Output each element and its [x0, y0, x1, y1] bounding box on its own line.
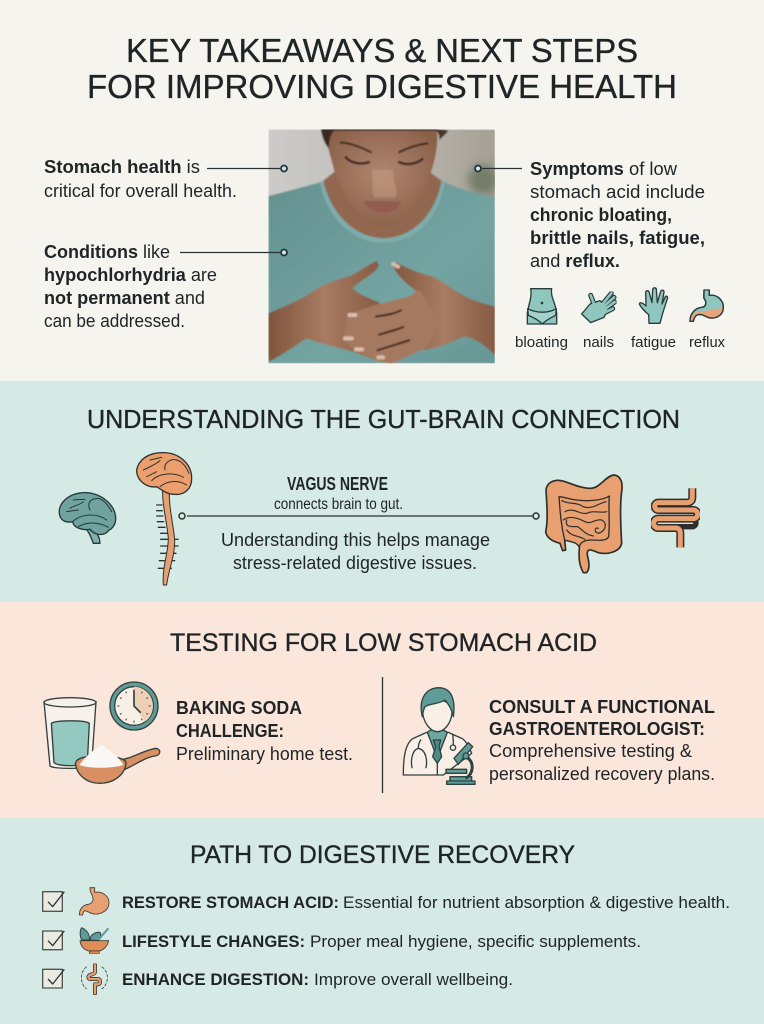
- row: enhance digestion: [43, 965, 513, 993]
- callout: symptoms: chronic bloating,: [530, 205, 672, 225]
- text: vagus nerve: stress-related digestive issues.: [233, 553, 477, 573]
- icon: reflux: [690, 290, 723, 321]
- callout: conditions: Conditions like: [44, 242, 170, 262]
- callout: symptoms: brittle nails, fatigue,: [530, 228, 705, 248]
- text: baking soda challenge: [176, 698, 353, 764]
- text: consult a functional gastroenterologist: [489, 697, 715, 784]
- callout: symptoms: Symptoms of low: [530, 159, 678, 179]
- text: enhance digestion: Improve overall wellbeing.: [314, 970, 513, 989]
- text: enhance digestion: ENHANCE DIGESTION:: [122, 970, 309, 989]
- text: consult a functional gastroenterologist: Comprehensive testing &: [489, 741, 692, 761]
- heading: UNDERSTANDING THE GUT-BRAIN CONNECTION: [87, 404, 680, 434]
- callout: stomach health: [44, 157, 287, 201]
- icon: checkbox and intestine: [43, 965, 107, 993]
- label: fatigue: fatigue: [631, 334, 676, 351]
- panel: key takeaways: [44, 38, 725, 364]
- text: lifestyle changes: [122, 932, 641, 951]
- icon row: symptoms: [515, 288, 725, 351]
- heading: TESTING FOR LOW STOMACH ACID: [170, 629, 597, 657]
- callout: conditions: hypochlorhydria are: [44, 265, 217, 285]
- text: consult a functional gastroenterologist: GASTROENTEROLOGIST:: [489, 719, 705, 739]
- connector: vagus nerve line: [179, 513, 539, 519]
- icon: small intestine: [654, 488, 698, 547]
- icon: large intestine: [546, 475, 622, 573]
- text: baking soda challenge: CHALLENGE:: [176, 721, 284, 741]
- icon: checkbox and stomach: [43, 888, 109, 915]
- text: restore stomach acid: RESTORE STOMACH ACID:: [122, 893, 339, 912]
- icon: checkbox and bowl: [43, 928, 109, 953]
- photo: woman with hands on chest: [268, 129, 498, 364]
- title: KEY TAKEAWAYS & NEXT STEPS: [126, 32, 638, 69]
- panel: gut-brain connection: [0, 381, 764, 602]
- callout: symptoms: stomach acid include: [530, 182, 705, 202]
- row: restore stomach acid: [43, 888, 730, 915]
- label: reflux: reflux: [689, 334, 725, 351]
- text: enhance digestion: [122, 970, 513, 989]
- callout: symptoms: and reflux.: [530, 251, 620, 271]
- text: restore stomach acid: [122, 893, 730, 912]
- text: baking soda challenge: BAKING SODA: [176, 698, 302, 718]
- callout: stomach health: critical for overall health.: [44, 181, 237, 201]
- callout: conditions: not permanent and: [44, 288, 205, 308]
- icon: orange brain with vagus nerve: [137, 453, 192, 585]
- icon: fatigue: [639, 288, 668, 323]
- text: consult a functional gastroenterologist: CONSULT A FUNCTIONAL: [489, 697, 715, 717]
- text: vagus nerve: [221, 474, 490, 573]
- title: FOR IMPROVING DIGESTIVE HEALTH: [87, 68, 677, 105]
- text: vagus nerve: connects brain to gut.: [274, 496, 403, 513]
- callout: stomach health: Stomach health is: [44, 157, 200, 177]
- callout: conditions: can be addressed.: [44, 311, 185, 331]
- text: vagus nerve: Understanding this helps manage: [221, 530, 490, 550]
- label: bloating: bloating: [515, 334, 568, 351]
- text: restore stomach acid: Essential for nutrient absorption & digestive health.: [343, 893, 730, 912]
- text: vagus nerve: VAGUS NERVE: [287, 474, 388, 494]
- label: nails: nails: [583, 334, 614, 351]
- icon: glass, clock and baking soda: [44, 682, 160, 783]
- title: [87, 32, 677, 105]
- icon: bloating: [527, 289, 557, 324]
- text: consult a functional gastroenterologist: personalized recovery plans.: [489, 764, 715, 784]
- callout: conditions: [44, 242, 287, 331]
- text: baking soda challenge: Preliminary home test.: [176, 744, 353, 764]
- row: lifestyle changes: [43, 928, 641, 953]
- heading: PATH TO DIGESTIVE RECOVERY: [190, 841, 575, 869]
- icon: nails: [582, 293, 615, 323]
- callout: symptoms: [475, 159, 705, 271]
- text: lifestyle changes: Proper meal hygiene, specific supplements.: [310, 932, 641, 951]
- text: lifestyle changes: LIFESTYLE CHANGES:: [122, 932, 305, 951]
- icon: doctor with microscope: [403, 688, 475, 784]
- icon: teal brain: [59, 493, 116, 543]
- panel: path to digestive recovery: [0, 818, 764, 1024]
- panel: testing for low stomach acid: [0, 602, 764, 818]
